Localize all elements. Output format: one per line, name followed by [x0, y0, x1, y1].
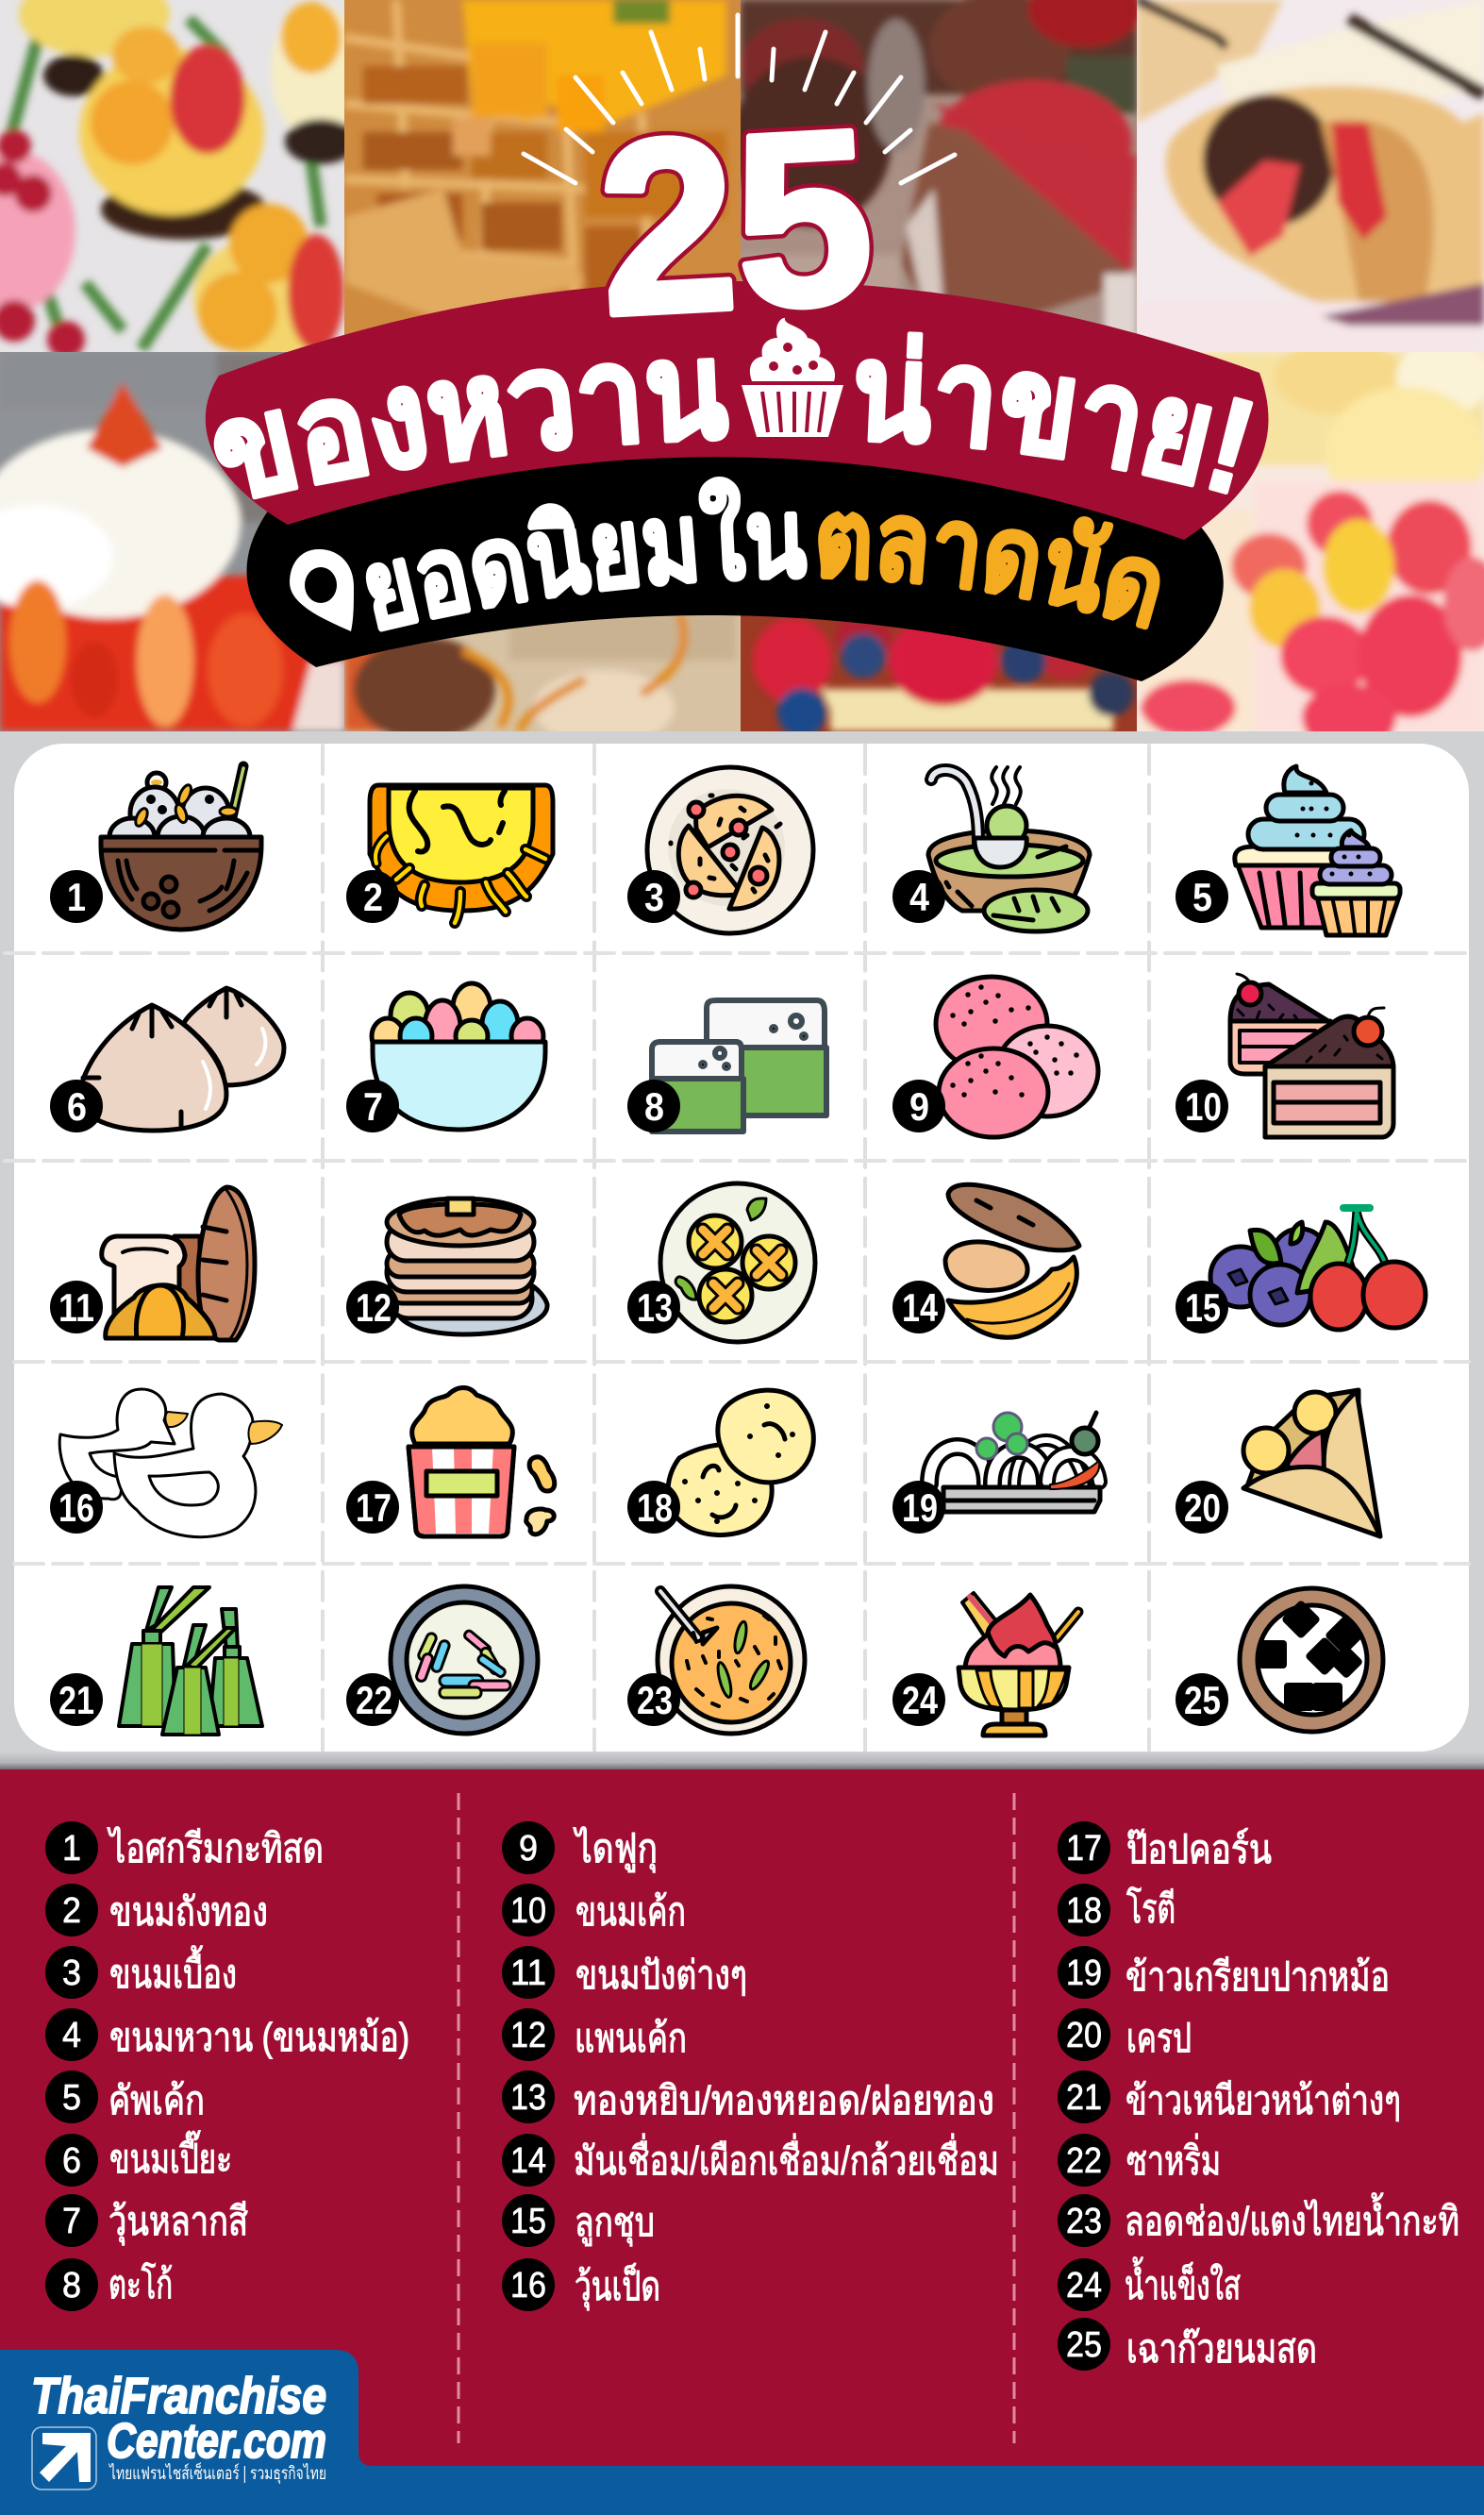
number badge 21: 21	[58, 1678, 94, 1722]
list item 16: วุ้นเป็ด	[575, 2263, 660, 2311]
number badge 23: 23	[637, 1678, 673, 1722]
cell 6: steamed dumplings	[50, 988, 284, 1132]
number badge 2	[346, 870, 399, 923]
icon: cupcake	[742, 318, 843, 437]
cell 17: popcorn	[346, 1387, 555, 1536]
list item 11: ขนมปังต่างๆ	[575, 1953, 747, 1997]
number badge 19: 19	[902, 1485, 938, 1530]
cell 9: daifuku	[892, 977, 1098, 1137]
number badge 3: 3	[644, 875, 664, 919]
icon: coconut bowl	[101, 766, 261, 930]
logo tagline: ไทยแฟรนไชส์เซ็นเตอร์ | รวมธุรกิจไทย	[108, 2461, 326, 2485]
cell 8: tako boxes	[627, 1000, 826, 1132]
number badge 5: 5	[1192, 875, 1212, 919]
logo wordmark line 1: ThaiFranchise	[31, 2368, 326, 2424]
list item 25: เฉาก๊วยนมสด	[1126, 2326, 1317, 2371]
number badge 22: 22	[356, 1678, 392, 1722]
list item 21: 21	[1066, 2078, 1102, 2118]
cell 22: sarim	[346, 1586, 538, 1734]
shadow under grid	[0, 1752, 1484, 1769]
cell 7: colorful jelly bowl	[346, 983, 545, 1132]
red title banner	[206, 281, 1268, 540]
cell 23: lod chong	[627, 1586, 805, 1734]
icon: plate with thong yip	[660, 1183, 815, 1342]
title ray burst	[524, 15, 955, 183]
list item 3	[45, 1945, 237, 1999]
icon: banana-leaf bundles	[119, 1587, 262, 1735]
title text part 1: ของหวาน	[213, 358, 729, 500]
list item 1: ไอศกรีมกะทิสด	[108, 1826, 324, 1870]
icon: coconut pudding boxes	[652, 1000, 826, 1132]
list item 19: 19	[1066, 1953, 1102, 1993]
icon: popcorn box	[409, 1387, 555, 1536]
list item 10	[502, 1884, 686, 1937]
list item 14	[502, 2134, 999, 2187]
photo: ice cream scoops	[344, 615, 741, 731]
list item 25: 25	[1066, 2325, 1102, 2365]
list item 2: ขนมถังทอง	[109, 1889, 268, 1934]
number badge 2: 2	[363, 875, 383, 919]
list item 12	[502, 2008, 687, 2061]
number badge 13	[627, 1281, 680, 1333]
number badge 17: 17	[356, 1485, 392, 1530]
cell 3: thai crispy pancake plate	[627, 760, 813, 933]
title text part 2: น่าขาย!	[856, 331, 1253, 495]
list item 22	[1058, 2134, 1221, 2187]
photo: berry tart	[741, 615, 1137, 731]
number badge 24: 24	[902, 1678, 939, 1722]
list item 9	[502, 1821, 658, 1874]
icon: bowl of lod chong	[658, 1586, 805, 1734]
photo collage header	[0, 0, 1484, 750]
photo: fruit jelly dessert	[1137, 340, 1484, 750]
list item 13: ทองหยิบ/ทองหยอด/ฝอยทอง	[574, 2078, 994, 2122]
list item 21	[1058, 2071, 1401, 2123]
list item 4: ขนมหวาน (ขนมหม้อ)	[109, 2015, 409, 2059]
list item 22: 22	[1066, 2141, 1102, 2181]
number badge 18: 18	[637, 1485, 673, 1530]
list item 15: ลูกชุบ	[575, 2200, 655, 2247]
cell 4: sweet soup with ladle	[892, 767, 1090, 931]
icon: dumplings	[79, 988, 284, 1131]
list item 1: 1	[62, 1829, 81, 1869]
list item 8	[45, 2258, 173, 2311]
icon: dish with noodle arcs	[929, 1413, 1100, 1512]
cell 20: crepe	[1176, 1390, 1380, 1536]
number badge 7: 7	[363, 1084, 383, 1129]
icon: bowl with pastel noodles	[391, 1586, 538, 1734]
list item 19	[1058, 1946, 1390, 1999]
list item 19: ข้าวเกรียบปากหม้อ	[1126, 1954, 1390, 1999]
list item 5	[45, 2071, 205, 2123]
list item 17: ป๊อปคอร์น	[1126, 1827, 1272, 1871]
icon: two roti	[668, 1390, 813, 1535]
icon: three daifuku	[936, 977, 1098, 1137]
list item 9: ไดฟูกุ	[573, 1826, 658, 1873]
logo: ThaiFranchise Center	[31, 2368, 326, 2490]
list item 18: 18	[1066, 1891, 1102, 1931]
number badge 14: 14	[902, 1285, 939, 1330]
number badge 20: 20	[1184, 1485, 1221, 1530]
number badge 22	[346, 1673, 399, 1726]
cell 16: duck-shaped jelly	[50, 1389, 282, 1537]
panel: icon grid	[5, 744, 1469, 1752]
photo: cupcakes	[0, 0, 361, 359]
photo: whipped cream and strawberries	[0, 352, 344, 731]
number badge 14	[892, 1281, 945, 1333]
number badge 4: 4	[909, 875, 930, 919]
list item 18: โรตี	[1126, 1886, 1176, 1931]
cell 24: shaved ice	[892, 1593, 1078, 1735]
list item 1	[45, 1821, 324, 1874]
number badge 11: 11	[58, 1285, 94, 1330]
cell 21: leaf-wrapped sticky rice	[50, 1587, 262, 1735]
list item 9: 9	[519, 1829, 538, 1869]
list item 6: ขนมเปี๊ยะ	[109, 2130, 232, 2181]
big number 25: 25	[592, 77, 878, 367]
list item 14: มันเชื่อม/เผือกเชื่อม/กล้วยเชื่อม	[574, 2134, 999, 2183]
number badge 5	[1176, 870, 1228, 923]
list item 4	[45, 2008, 409, 2061]
list item 14: 14	[510, 2141, 546, 2181]
list item 12: แพนเค้ก	[575, 2016, 687, 2060]
list item 4: 4	[62, 2016, 81, 2055]
list item 15: 15	[510, 2202, 546, 2241]
list item 7: 7	[62, 2202, 81, 2241]
cell 10: layer cakes	[1176, 974, 1393, 1137]
number badge 12: 12	[356, 1285, 392, 1330]
list item 18	[1058, 1884, 1176, 1937]
list item 2	[45, 1884, 268, 1937]
number badge 3	[627, 870, 680, 923]
list item 8: 8	[62, 2266, 81, 2305]
location pin icon	[290, 549, 354, 631]
list item 16: 16	[510, 2266, 546, 2305]
icon: bowl of grass jelly	[1240, 1588, 1383, 1732]
list item 2: 2	[62, 1891, 81, 1931]
number badge 1	[50, 870, 103, 923]
list item 7: วุ้นหลากสี	[108, 2199, 248, 2246]
list item 20: เครป	[1126, 2016, 1192, 2060]
number badge 10	[1176, 1080, 1228, 1132]
list item 13	[502, 2071, 994, 2123]
number badge 6	[50, 1080, 103, 1132]
list item 5: 5	[62, 2078, 81, 2118]
number badge 15: 15	[1185, 1285, 1221, 1330]
number badge 16: 16	[58, 1485, 94, 1530]
list item 17: 17	[1066, 1829, 1102, 1869]
list item 20	[1058, 2008, 1192, 2061]
list item 6: 6	[62, 2141, 81, 2181]
icon: bowl of jellies	[372, 983, 545, 1130]
photo: chocolate strawberries	[731, 0, 1142, 352]
logo arrow icon	[32, 2427, 96, 2490]
photo: waffle with mango	[344, 0, 741, 352]
cell 13: golden egg yolk desserts	[627, 1183, 815, 1342]
cell 15: fruit-shaped mung bean sweets	[1176, 1208, 1426, 1333]
logo wordmark line 2: Center.com	[107, 2414, 326, 2469]
icon: two white ducks	[59, 1389, 282, 1537]
icon: slices of cake	[1230, 974, 1393, 1137]
icon: golden half-moon	[370, 785, 553, 923]
list item 22: ซาหริ่ม	[1126, 2134, 1221, 2183]
list item 3: 3	[62, 1953, 81, 1993]
number badge 24	[892, 1673, 945, 1726]
number badge 11	[50, 1281, 103, 1333]
panel: numbered list	[0, 1769, 1484, 2515]
list item 10: 10	[510, 1891, 546, 1931]
number badge 10: 10	[1185, 1084, 1222, 1129]
number badge 23	[627, 1673, 680, 1726]
number badge 8	[627, 1080, 680, 1132]
number badge 13: 13	[637, 1285, 673, 1330]
number badge 7	[346, 1080, 399, 1132]
list item 12: 12	[510, 2016, 546, 2055]
cell 2: thong thread dessert	[346, 785, 553, 923]
list item 8: ตะโก้	[108, 2261, 173, 2306]
list item 24: 24	[1066, 2266, 1102, 2305]
cell 1: ice cream in coconut	[50, 766, 261, 930]
icon: sweet potato, taro, banana	[945, 1184, 1079, 1337]
number badge 8: 8	[644, 1084, 664, 1129]
number badge 17	[346, 1481, 399, 1534]
subtitle text orange: ตลาดนัด	[818, 511, 1160, 630]
list item 7	[45, 2194, 248, 2247]
icon: loaf, baguette, croissant	[102, 1187, 255, 1340]
cell 14: candied tubers and banana	[892, 1184, 1079, 1337]
list item 23	[1058, 2192, 1459, 2247]
number badge 15	[1176, 1281, 1228, 1333]
cell 5: cupcakes	[1176, 766, 1400, 935]
list item 5: คัพเค้ก	[108, 2078, 205, 2122]
cell 18: roti	[627, 1390, 813, 1535]
icon: pancake stack	[387, 1199, 547, 1334]
list item 11	[502, 1946, 747, 1999]
list item 16	[502, 2258, 660, 2311]
icon: blueberries and cherries	[1210, 1208, 1426, 1330]
list item 21: ข้าวเหนียวหน้าต่างๆ	[1126, 2078, 1401, 2122]
list item 6	[45, 2130, 232, 2187]
list item 15	[502, 2194, 655, 2247]
list item 20: 20	[1066, 2016, 1102, 2055]
big number 25: 25	[592, 77, 878, 367]
list item 25	[1058, 2318, 1317, 2371]
icon: plate with three pancake slices	[647, 760, 813, 933]
number badge 19	[892, 1481, 945, 1534]
icon: shaved ice sundae	[959, 1593, 1078, 1735]
number badge 12	[346, 1281, 399, 1333]
list item 24: น้ำแข็งใส	[1125, 2256, 1241, 2307]
number badge 6: 6	[67, 1084, 87, 1129]
number badge 18	[627, 1481, 680, 1534]
list item 13: 13	[510, 2078, 546, 2118]
list item 10: ขนมเค้ก	[575, 1889, 686, 1934]
number badge 25: 25	[1184, 1678, 1221, 1722]
black subtitle banner	[247, 457, 1224, 681]
list item 11: 11	[510, 1953, 546, 1993]
photo: crepe with strawberries	[1137, 0, 1484, 352]
icon: bowl of green soup	[928, 767, 1090, 931]
cell 12: pancakes	[346, 1199, 547, 1334]
list item 23: 23	[1066, 2202, 1102, 2241]
subtitle text white: ยอดนิยมใน	[366, 477, 808, 632]
number badge 9: 9	[909, 1084, 929, 1129]
number badge 9	[892, 1080, 945, 1132]
icon: two cupcakes	[1235, 766, 1400, 935]
icon: crepe with fruit	[1243, 1390, 1380, 1536]
list item 24	[1058, 2256, 1241, 2311]
number badge 4	[892, 870, 945, 923]
cell 11: assorted bread	[50, 1187, 255, 1340]
number badge 1: 1	[67, 875, 86, 919]
cell 25: grass jelly with milk	[1176, 1588, 1383, 1732]
cell 19: rice crackers	[892, 1413, 1100, 1534]
list item 17	[1058, 1821, 1272, 1874]
list item 3: ขนมเบื้อง	[109, 1945, 237, 1996]
